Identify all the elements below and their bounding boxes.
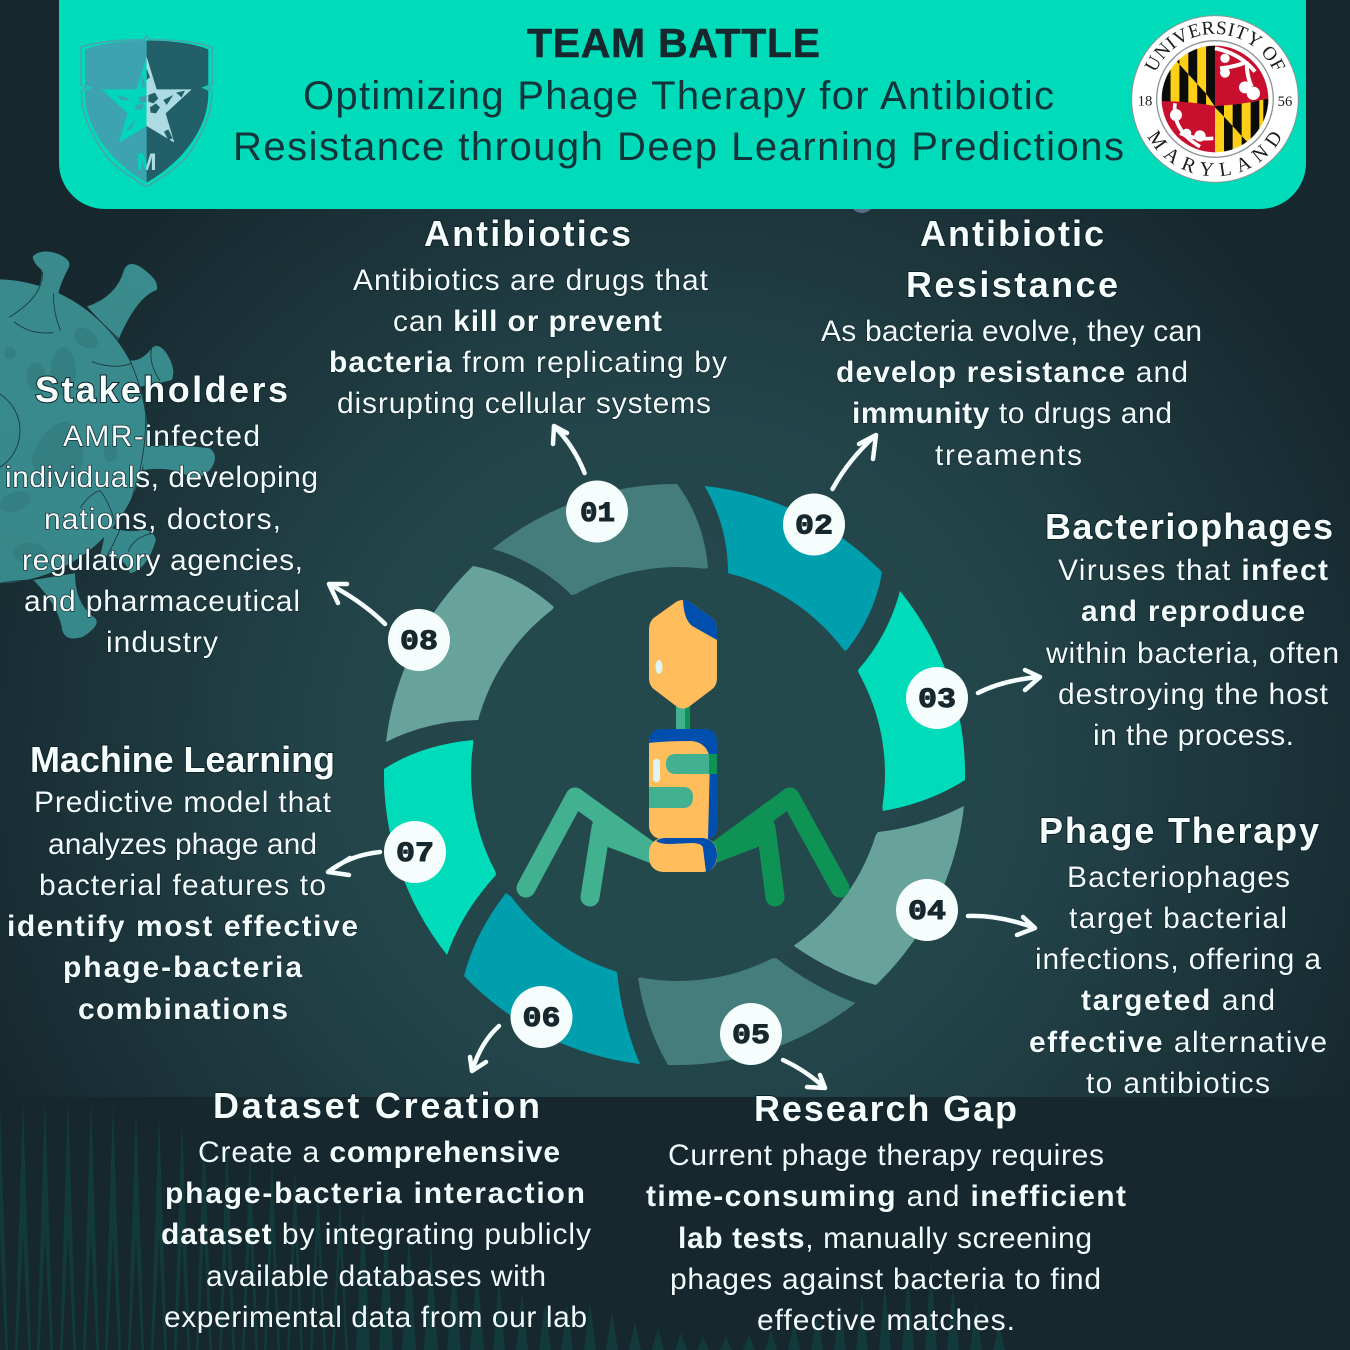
text: Machine Learning: phage-bacteria bbox=[63, 951, 302, 984]
text: Phage Therapy: to antibiotics bbox=[1086, 1067, 1270, 1100]
logo: University of Maryland seal: 56 bbox=[1278, 94, 1292, 110]
text: Phage Therapy: targeted and bbox=[1081, 984, 1275, 1017]
text: Stakeholders: AMR-infected bbox=[63, 420, 260, 453]
number badges: 08 bbox=[400, 627, 438, 658]
number badges bbox=[384, 480, 968, 1065]
text: Stakeholders: nations, doctors, bbox=[44, 503, 281, 536]
text: Bacteriophages: in the process. bbox=[1093, 719, 1294, 752]
text: Research Gap: Research Gap bbox=[754, 1088, 1017, 1129]
text: Stakeholders: and pharmaceutical bbox=[24, 585, 300, 618]
text: Dataset Creation: phage-bacteria interaction bbox=[165, 1177, 585, 1210]
text: Research Gap: time-consuming and inefficient bbox=[646, 1180, 1126, 1213]
ring diagram: eight segments bbox=[384, 484, 965, 1065]
text: Antibiotics bbox=[329, 213, 727, 420]
text: Machine Learning: identify most effective bbox=[7, 910, 358, 943]
header banner bbox=[59, 0, 1306, 209]
logo: University of Maryland seal: MARYLAND bbox=[1147, 130, 1280, 176]
text: Antibiotic Resistance: Resistance bbox=[906, 264, 1118, 305]
text: Antibiotics: Antibiotics bbox=[424, 213, 631, 254]
number badges: 02 bbox=[795, 512, 833, 542]
virus illustration bbox=[0, 251, 215, 639]
text: Machine Learning: Machine Learning bbox=[30, 739, 335, 780]
logo: team shield bbox=[81, 36, 212, 187]
logo: University of Maryland seal: 18 bbox=[1138, 93, 1152, 109]
text: Research Gap: lab tests, manually screening bbox=[678, 1222, 1092, 1255]
text: Antibiotics: bacteria from replicating by bbox=[329, 346, 727, 379]
text: Research Gap: phages against bacteria to find bbox=[670, 1263, 1101, 1296]
number badges: 01 bbox=[580, 499, 615, 530]
logo: University of Maryland seal: UNIVERSITY OF bbox=[1144, 22, 1286, 70]
text: Research Gap: effective matches. bbox=[757, 1304, 1015, 1337]
text: Stakeholders: individuals, developing bbox=[5, 461, 318, 494]
bacteriophage illustration bbox=[526, 600, 840, 897]
arrows bbox=[328, 426, 1040, 1088]
text: Bacteriophages: within bacteria, often bbox=[1045, 637, 1339, 670]
text: Dataset Creation: available databases with bbox=[206, 1260, 546, 1293]
text: Bacteriophages: and reproduce bbox=[1081, 595, 1305, 628]
text: Stakeholders: Stakeholders bbox=[35, 369, 288, 410]
text: Antibiotic Resistance bbox=[821, 213, 1202, 472]
number badges: 07 bbox=[396, 839, 434, 870]
logo: team shield: M bbox=[137, 149, 157, 176]
text: Phage Therapy: infections, offering a bbox=[1035, 943, 1321, 976]
text: Phage Therapy: effective alternative bbox=[1029, 1026, 1327, 1059]
text: Phage Therapy: target bacterial bbox=[1069, 902, 1287, 935]
text: Antibiotic Resistance: Antibiotic bbox=[920, 213, 1104, 254]
text: Phage Therapy: Bacteriophages bbox=[1067, 861, 1290, 894]
text: Antibiotics: can kill or prevent bbox=[393, 305, 662, 338]
text: Research Gap: Current phage therapy requires bbox=[668, 1139, 1104, 1172]
text: Antibiotics: disrupting cellular systems bbox=[337, 387, 711, 420]
text: Machine Learning bbox=[7, 739, 358, 1026]
text: Machine Learning: analyzes phage and bbox=[48, 828, 317, 861]
text: Dataset Creation: Create a comprehensive bbox=[198, 1136, 560, 1169]
title block: Resistance through Deep Learning Predictions bbox=[233, 125, 1124, 169]
number badges: 03 bbox=[918, 685, 956, 716]
text: Antibiotic Resistance: treaments bbox=[935, 439, 1082, 472]
text: Dataset Creation: experimental data from our lab bbox=[164, 1301, 587, 1334]
text: Phage Therapy: Phage Therapy bbox=[1039, 810, 1319, 851]
text: Antibiotic Resistance: develop resistance and bbox=[836, 356, 1188, 389]
number badges: 06 bbox=[522, 1004, 560, 1035]
text: Bacteriophages: Viruses that infect bbox=[1058, 554, 1328, 587]
small blob behind header bbox=[850, 189, 874, 213]
title block: TEAM BATTLE bbox=[527, 20, 820, 66]
title block bbox=[233, 20, 1124, 169]
text: Bacteriophages bbox=[1045, 506, 1339, 752]
text: Machine Learning: Predictive model that bbox=[34, 786, 332, 819]
text: Antibiotic Resistance: As bacteria evolve, they can bbox=[821, 315, 1202, 348]
number badges: 05 bbox=[732, 1021, 770, 1052]
text: Dataset Creation: Dataset Creation bbox=[213, 1085, 540, 1126]
background waveform band bbox=[0, 1097, 1350, 1350]
text: Dataset Creation bbox=[161, 1085, 591, 1334]
text: Machine Learning: bacterial features to bbox=[39, 869, 326, 902]
text: Stakeholders: regulatory agencies, bbox=[22, 544, 303, 577]
text: Bacteriophages: Bacteriophages bbox=[1045, 506, 1333, 547]
text: Dataset Creation: dataset by integrating publicly bbox=[161, 1218, 591, 1251]
text: Stakeholders: industry bbox=[106, 626, 218, 659]
number badges: 04 bbox=[908, 897, 946, 928]
text: Antibiotic Resistance: immunity to drugs and bbox=[852, 397, 1172, 430]
text: Antibiotics: Antibiotics are drugs that bbox=[353, 264, 709, 297]
text: Stakeholders bbox=[5, 369, 318, 659]
title block: Optimizing Phage Therapy for Antibiotic bbox=[303, 74, 1054, 118]
logo: University of Maryland seal bbox=[1131, 15, 1299, 183]
text: Research Gap bbox=[646, 1088, 1126, 1337]
text: Machine Learning: combinations bbox=[78, 993, 288, 1026]
text: Bacteriophages: destroying the host bbox=[1058, 678, 1329, 711]
text: Phage Therapy bbox=[1029, 810, 1327, 1100]
